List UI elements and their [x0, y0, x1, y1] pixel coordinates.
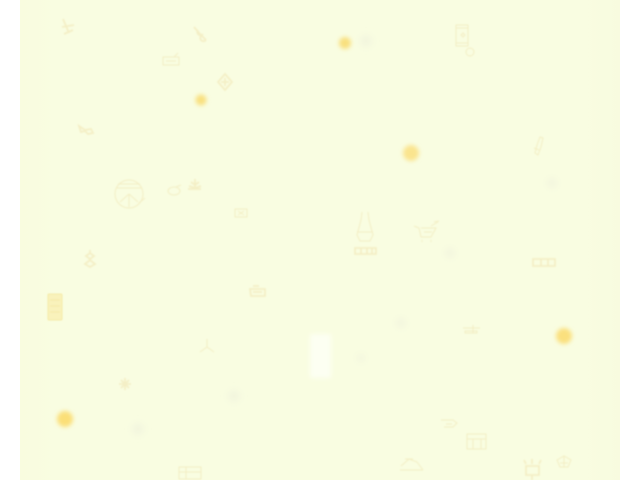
icon: iron	[400, 459, 423, 470]
faint grey smudges	[132, 35, 557, 435]
icon: tripod	[200, 339, 214, 352]
icon: bottle slanted	[534, 137, 543, 155]
icon: leaf cluster	[194, 27, 206, 41]
icon: small tile	[235, 209, 247, 217]
icon: sprout	[188, 179, 201, 189]
icon: vase	[357, 212, 373, 241]
icon: vase base band	[355, 248, 376, 254]
icon: small machine	[463, 325, 480, 333]
icon: tall card	[48, 294, 62, 320]
icon: plant top left	[62, 19, 74, 34]
icon: round pot	[115, 180, 145, 208]
icon: golden burst	[119, 378, 131, 390]
icon: small bowl	[168, 185, 181, 195]
icon: crate	[179, 467, 201, 479]
icon: cart	[414, 221, 439, 242]
icon: arrow tag	[441, 420, 457, 427]
icon: flower stack	[85, 250, 95, 267]
icon: keyboard box	[163, 53, 179, 65]
line icons	[48, 19, 571, 480]
icon: basket with handles	[524, 459, 541, 480]
icon: diamond tile	[218, 74, 232, 90]
icon: box stall	[467, 434, 486, 449]
icon: shell	[557, 456, 571, 467]
icon: phone	[456, 25, 468, 46]
glowing dots	[57, 37, 572, 427]
icon: battery pill	[533, 259, 555, 266]
icon: bow	[79, 126, 93, 134]
icon: tag box	[250, 286, 265, 296]
icon: heart badge	[466, 48, 474, 56]
white bottle glow	[310, 334, 331, 378]
